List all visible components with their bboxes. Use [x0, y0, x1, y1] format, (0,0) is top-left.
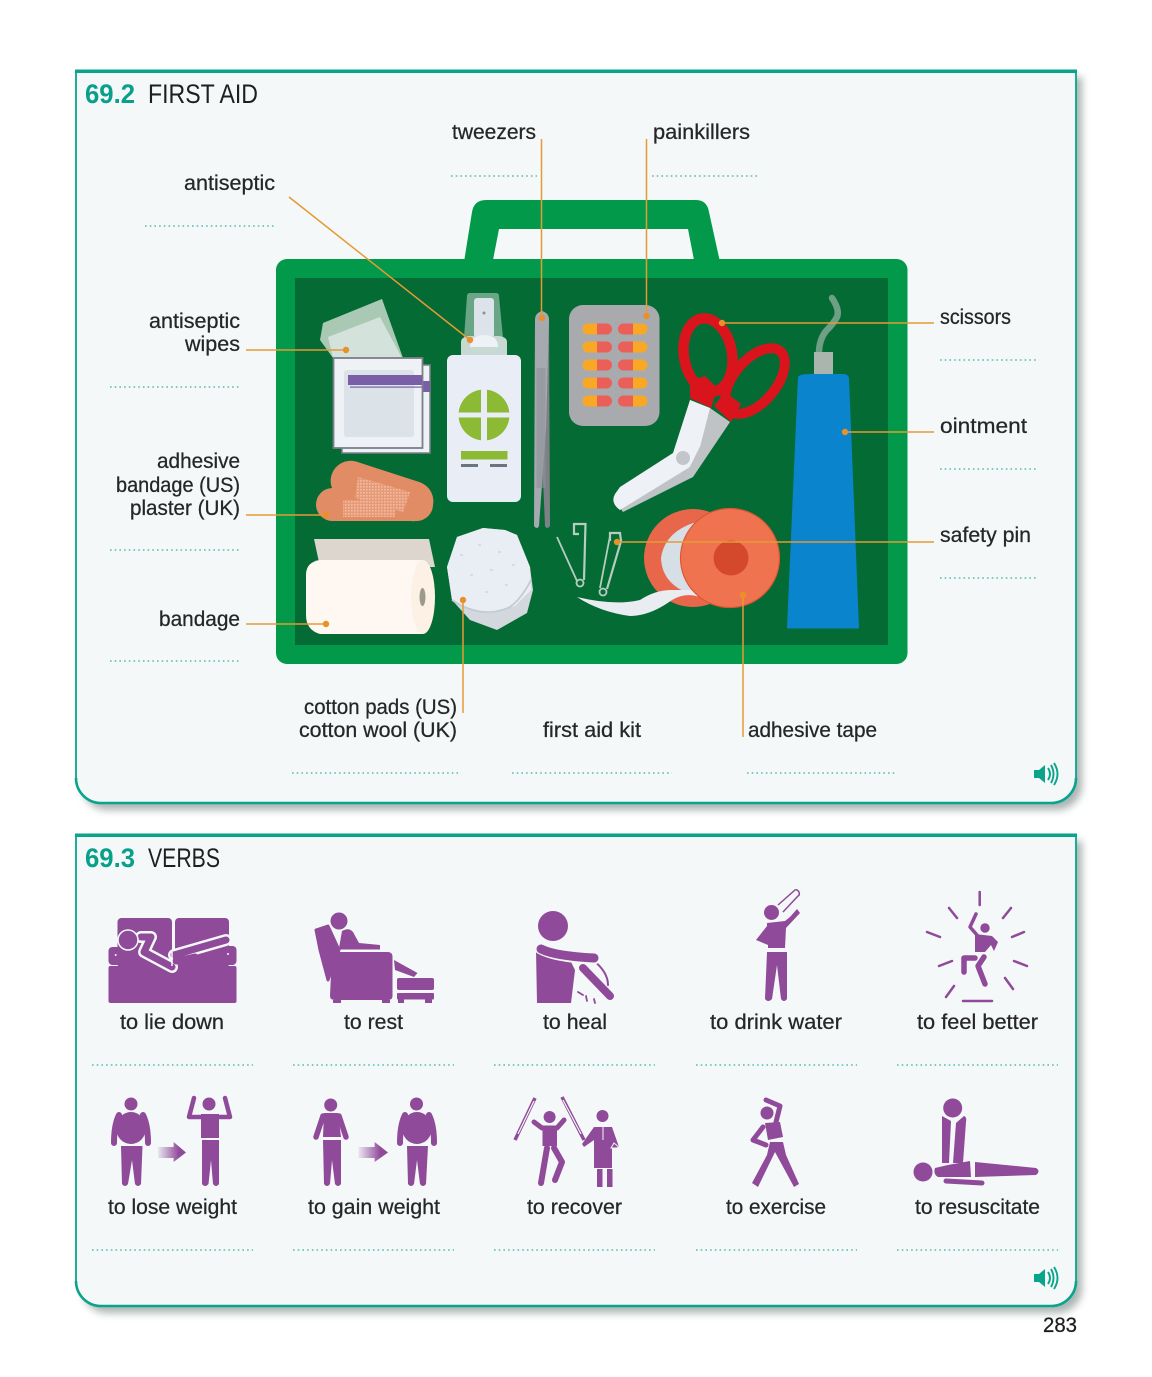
- labels: first aid vocabulary: cotton wool (UK): [299, 719, 457, 742]
- panel: verbs: [75, 834, 1082, 1313]
- icon: to lose weight: [114, 1098, 230, 1186]
- arrow: lose weight: [158, 1142, 186, 1162]
- labels: first aid vocabulary: ointment: [940, 415, 1027, 438]
- labels: first aid vocabulary: scissors: [940, 306, 1011, 329]
- labels: first aid vocabulary: painkillers: [653, 121, 750, 144]
- icon: audio speaker: [1034, 763, 1058, 785]
- labels: first aid vocabulary: adhesive: [157, 450, 240, 473]
- illustration: cotton pads: [447, 528, 533, 630]
- leader lines: [246, 139, 934, 737]
- icon: to feel better: [927, 892, 1027, 1001]
- arrow: gain weight: [359, 1142, 388, 1162]
- label: to recover: to recover: [527, 1196, 622, 1219]
- dotted answer lines: verbs row two: [92, 1249, 1058, 1251]
- heading: 69.3 verbs: 69.3: [85, 843, 135, 873]
- icon: to resuscitate: [914, 1098, 1038, 1183]
- heading: 69.3 verbs: [85, 843, 220, 873]
- labels: first aid vocabulary: antiseptic: [184, 172, 275, 195]
- illustration: adhesive tape roll: [577, 508, 780, 616]
- labels: first aid vocabulary: tweezers: [452, 121, 536, 144]
- label: to heal: to heal: [543, 1011, 607, 1034]
- icon: to lie down: [108, 918, 236, 1003]
- labels: first aid vocabulary: wipes: [184, 333, 240, 356]
- labels: first aid vocabulary: adhesive tape: [748, 719, 877, 742]
- labels: first aid vocabulary: antiseptic: [149, 310, 240, 333]
- label: to rest: to rest: [344, 1011, 403, 1034]
- labels: first aid vocabulary: first aid kit: [543, 719, 641, 742]
- illustration: painkillers blister pack: [569, 305, 660, 426]
- panel: first aid: [75, 70, 1082, 810]
- dotted answer lines: verbs row one: [92, 1064, 1058, 1066]
- heading: 69.2 first aid: [85, 79, 258, 109]
- label: to feel better: to feel better: [917, 1011, 1038, 1034]
- icon: audio speaker: [1034, 1267, 1058, 1289]
- illustration: bandage roll: [306, 539, 435, 634]
- illustration: tweezers: [534, 311, 550, 528]
- label: to resuscitate: to resuscitate: [915, 1196, 1040, 1219]
- dotted answer lines: first aid: [110, 176, 1037, 773]
- illustration: safety pins: [557, 524, 621, 596]
- label: to drink water: to drink water: [710, 1011, 842, 1034]
- label: to gain weight: to gain weight: [308, 1196, 440, 1219]
- labels: first aid vocabulary: plaster (UK): [130, 497, 240, 520]
- icon: to gain weight: [316, 1098, 434, 1186]
- illustration: antiseptic spray bottle: [447, 293, 521, 502]
- illustration: ointment tube: [787, 298, 859, 628]
- heading: 69.2 first aid: 69.2: [85, 79, 135, 109]
- icon: to heal: [536, 911, 610, 1003]
- illustration: adhesive bandage plasters: [316, 456, 439, 526]
- illustration: scissors: [613, 314, 796, 512]
- illustration: antiseptic wipes: [320, 299, 430, 453]
- labels: first aid vocabulary: safety pin: [940, 524, 1031, 547]
- heading: 69.3 verbs: VERBS: [148, 843, 220, 873]
- illustration: first aid kit case: [276, 200, 908, 664]
- icon: to exercise: [752, 1100, 799, 1187]
- label: to lose weight: to lose weight: [108, 1196, 237, 1219]
- heading: 69.2 first aid: FIRST AID: [148, 79, 258, 109]
- labels: first aid vocabulary: bandage (US): [116, 474, 240, 497]
- icon: to recover: [515, 1097, 620, 1187]
- icon: to rest: [316, 912, 434, 1003]
- page number: 283: [1043, 1314, 1077, 1337]
- label: to exercise: to exercise: [726, 1196, 826, 1219]
- labels: first aid vocabulary: bandage: [159, 608, 240, 631]
- labels: first aid vocabulary: cotton pads (US): [304, 696, 457, 719]
- label: to lie down: to lie down: [120, 1011, 224, 1034]
- icon: to drink water: [756, 890, 800, 1001]
- labels: first aid vocabulary: [116, 121, 1031, 742]
